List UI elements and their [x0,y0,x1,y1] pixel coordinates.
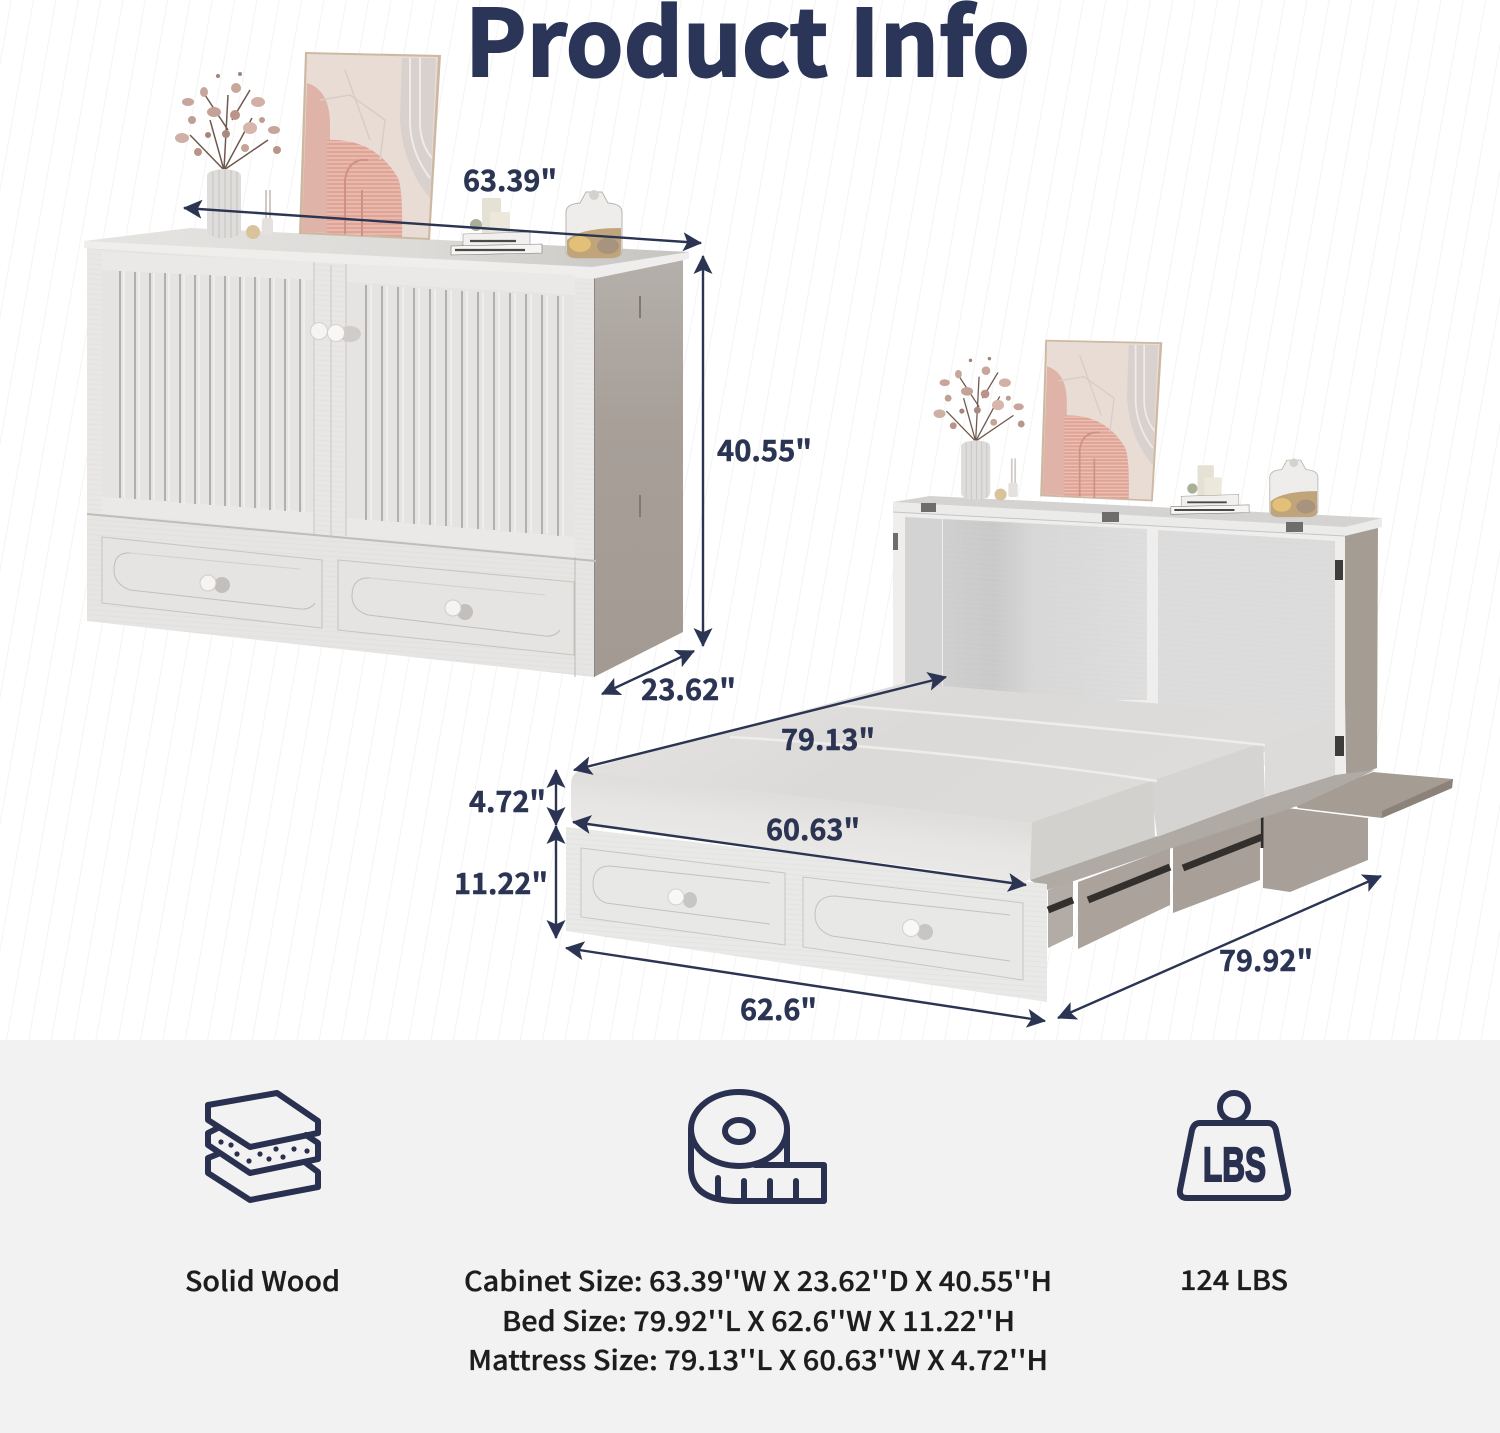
bed drawer left [581,848,785,945]
dimension: cabinet height: 40.55" [717,428,812,470]
props on open bed shelf [934,340,1318,517]
candles [470,198,510,238]
under-bed drawer 2 [1173,813,1260,913]
dimension: bed width: 62.6" [740,987,817,1029]
side rail [1030,770,1375,890]
cabinet side panel [592,256,683,677]
caption: size details: Bed Size: 79.92''L X 62.6''W X 11.22''H [502,1300,1015,1339]
icon: measuring tape [691,1092,824,1201]
dimension: bed height [454,826,556,938]
props on cabinet: flowers, art, vase, books, jar [175,52,622,258]
left door [102,252,313,533]
mattress front face [571,771,1032,881]
icon: weight LBS [1180,1093,1288,1198]
mattress section 3 end [1265,715,1335,797]
dimension: mattress width [573,807,1026,885]
dimension: bed height: 11.22" [454,861,548,903]
vase [207,169,241,238]
dimension: mattress length: 79.13" [781,717,875,759]
glass jar [566,190,622,258]
dimension: cabinet depth: 23.62" [641,667,736,709]
dimension: mattress length [574,677,946,770]
dimension: cabinet width [184,158,701,243]
caption: size details: Cabinet Size: 63.39''W X 23.62''D X 40.55''H [464,1260,1052,1299]
dimension: mattress width: 60.63" [766,807,860,849]
murphy bed (open) [566,496,1453,1002]
back interior right panel [1158,530,1335,760]
back frame [893,505,1345,780]
bed right side column [1343,523,1378,780]
dimension: mattress height: 4.72" [469,779,546,821]
mattress top [576,683,1335,823]
right drawer [338,560,574,655]
caption: size details: Mattress Size: 79.13''L X 60.63''W X 4.72''H [468,1339,1048,1378]
back interior left column [905,517,942,700]
caption: weight: 124 LBS [1180,1259,1288,1298]
right door [347,264,575,557]
icon: weight LBS: LBS [1203,1139,1266,1192]
cabinet (closed) [84,228,690,677]
caption: solid wood: Solid Wood [185,1260,340,1299]
icon: solid wood layers [208,1093,318,1200]
flower stems [175,72,281,170]
books [451,232,542,255]
bed drawer right [803,877,1023,980]
dimension: bed length [1058,876,1381,1018]
end gap piece [1048,880,1073,948]
diffuser and ornament [246,190,273,239]
shelf top [893,496,1382,536]
metal slides [1048,837,1262,910]
hinges [893,503,1344,756]
bottom info band [0,1040,1500,1433]
dimension: bed length: 79.92" [1219,938,1313,980]
mattress section 2 end [1150,740,1265,837]
side table [1293,772,1453,818]
storage block [1262,805,1368,892]
mattress fold lines [730,705,1265,781]
dimension: mattress height [469,770,556,825]
cabinet top slab [84,228,690,279]
framed art [299,52,441,240]
under-bed drawer 1 [1078,848,1170,949]
left drawer [102,537,322,628]
dimension: cabinet width: 63.39" [463,158,557,200]
caption: size details [464,1260,1052,1378]
mattress section 1 end [1025,775,1155,880]
back interior left panel [943,519,1147,700]
cabinet front [87,248,594,677]
dimension: bed width [566,948,1045,1029]
door stile shadow [314,262,346,540]
drawer base [87,513,596,677]
door knobs [310,322,361,342]
bed front panel [566,827,1047,1002]
dimension: cabinet depth [602,651,736,709]
